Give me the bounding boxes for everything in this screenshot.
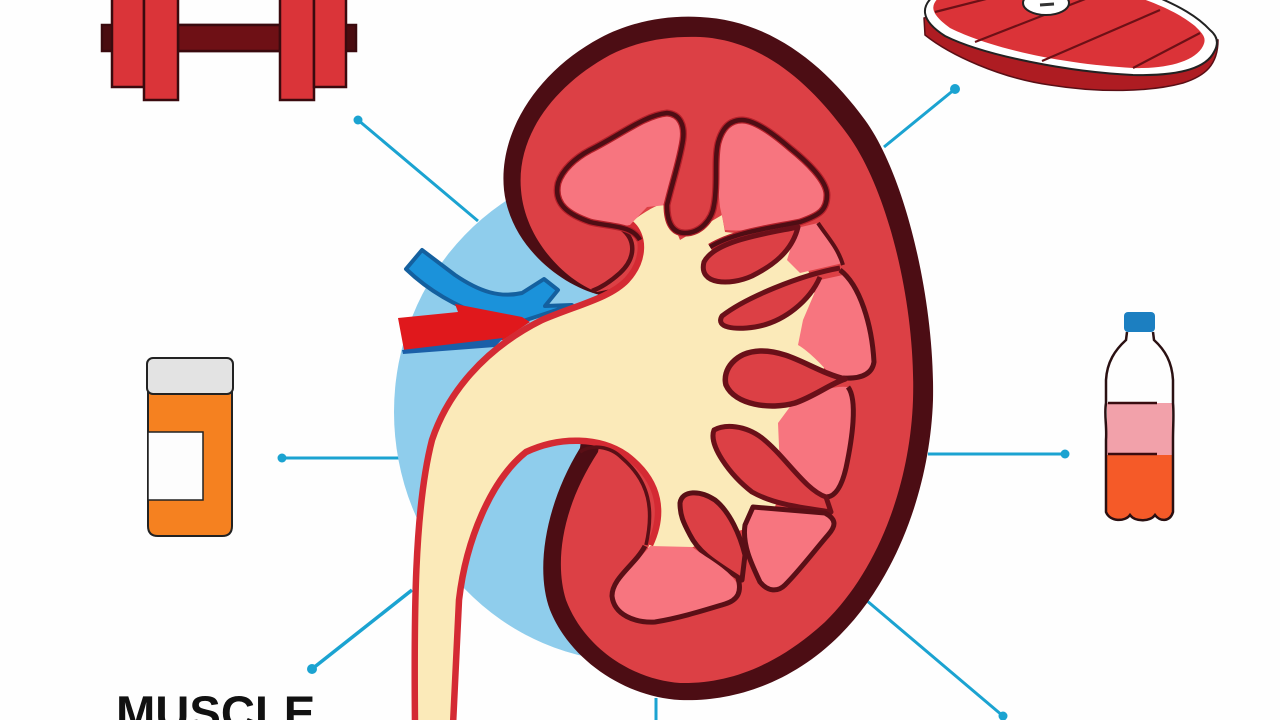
- renal pelvis and ureter: [413, 203, 830, 720]
- icon: steak: [924, 0, 1218, 90]
- bottle body: [148, 392, 232, 536]
- connector: water bottle: [928, 450, 1070, 458]
- left outer plate: [112, 0, 144, 87]
- steak bone: [1023, 0, 1069, 15]
- dumbbell bar: [178, 25, 280, 51]
- artery underside: [402, 338, 503, 354]
- steak grain lines: [935, 0, 1200, 68]
- steak meat: [933, 0, 1205, 68]
- icon: water bottle: [1105, 312, 1173, 520]
- calyx 2: [721, 268, 840, 328]
- bottle liquid orange: [1106, 455, 1173, 520]
- column between pyramids: [667, 140, 718, 233]
- icon: pill bottle: [147, 358, 233, 536]
- pyramid outline bottom: [612, 546, 739, 622]
- upper pyramids outline: [557, 113, 827, 247]
- connector: dumbbell: [354, 116, 478, 221]
- pyramid edge small right: [818, 223, 843, 265]
- steak side: [924, 10, 1218, 90]
- kidney outer capsule: [503, 17, 933, 700]
- upper hilum edge: [592, 229, 632, 291]
- connector: steak: [884, 84, 960, 147]
- lower hilum edge: [580, 447, 650, 545]
- ureter inner wall: [453, 441, 658, 720]
- kidney cortex: [521, 37, 913, 683]
- pyramid: right: [798, 275, 874, 380]
- background circle: [394, 162, 876, 662]
- pyramid: upper left: [557, 113, 683, 226]
- steak top rim: [925, 0, 1217, 75]
- bottle fill marks: [1108, 403, 1157, 454]
- calyx 5: [680, 493, 745, 580]
- bottle cap: [147, 358, 233, 394]
- bottle cap: [1124, 312, 1155, 332]
- right inner plate: [280, 0, 314, 100]
- right outer plate: [314, 0, 346, 87]
- connector: pill bottle: [278, 454, 402, 462]
- bottle label: [148, 432, 203, 500]
- pyramid outline right: [840, 270, 874, 378]
- connector: muscle label: [307, 590, 412, 674]
- renal vessels: [398, 250, 572, 354]
- bottle outline: [1105, 332, 1173, 520]
- kidney: [413, 17, 933, 720]
- calyx 3: [725, 351, 845, 406]
- dumbbell end caps: [102, 25, 356, 51]
- pyramid: bottom: [612, 546, 739, 622]
- bottle liquid pink: [1107, 403, 1172, 455]
- left inner plate: [144, 0, 178, 100]
- calyx 4: [713, 426, 831, 512]
- upper pyramids red halo: [557, 113, 827, 247]
- ureter outer wall: [415, 223, 641, 720]
- pyramid: lower right: [778, 387, 853, 498]
- pyramid: upper centre: [716, 120, 827, 231]
- calyx 1: [703, 227, 798, 282]
- icon: dumbbell: [102, 0, 356, 100]
- vein: [406, 250, 572, 322]
- connector: lower right: [866, 600, 1008, 720]
- pyramid: lower centre: [744, 507, 834, 590]
- artery: [398, 304, 530, 350]
- pyramid: small right: [787, 223, 843, 273]
- bone marrow: [1040, 4, 1054, 5]
- pyramid outline lower right: [826, 387, 853, 497]
- connector: bottom: [654, 698, 658, 720]
